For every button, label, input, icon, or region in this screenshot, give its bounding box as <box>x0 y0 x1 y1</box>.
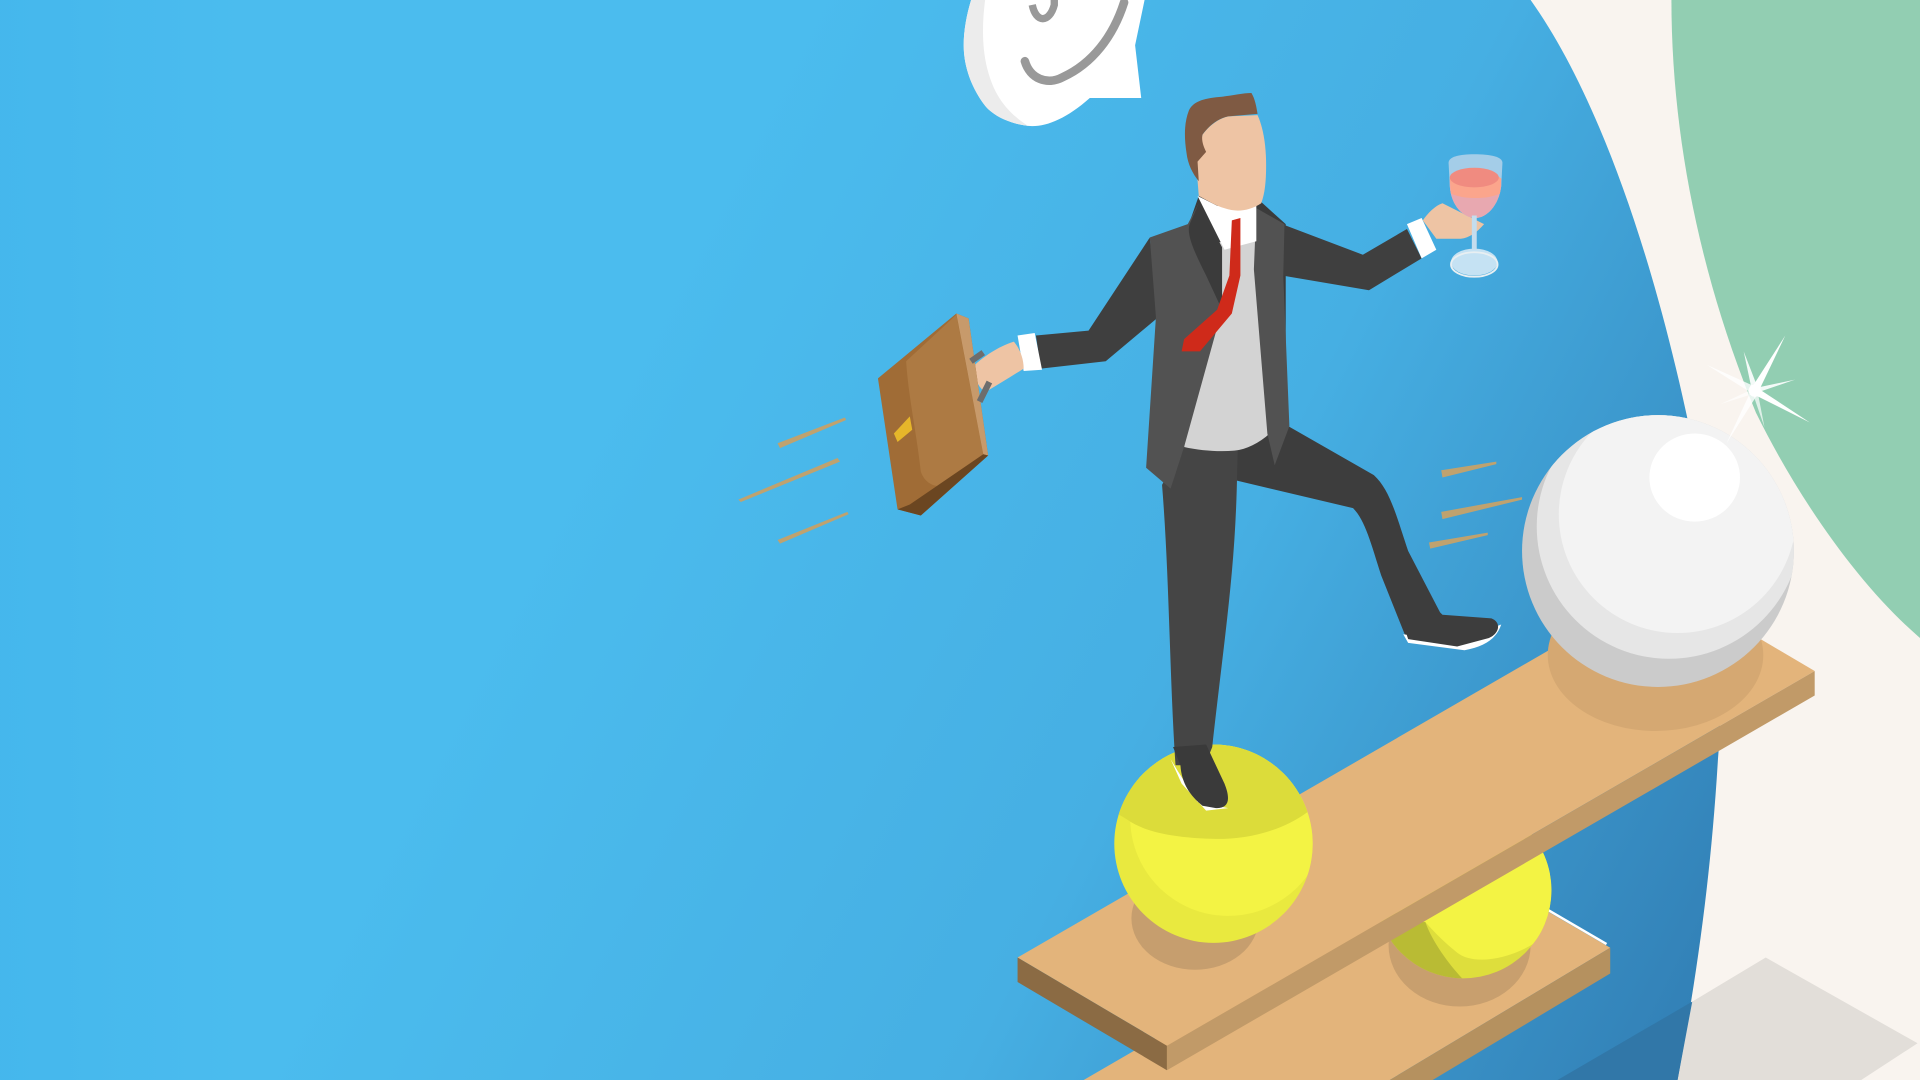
jacket left <box>1146 203 1222 489</box>
jacket right <box>1254 208 1289 465</box>
white ball <box>1522 394 1801 687</box>
shirt <box>1184 233 1270 451</box>
seesaw plank <box>1018 579 1815 1070</box>
lower plank <box>1084 861 1610 1080</box>
wine glass <box>1449 154 1502 277</box>
torso underlay <box>1185 196 1286 443</box>
standing shoe <box>1171 744 1228 811</box>
floor shadow: grey <box>1678 958 1918 1080</box>
right cuff <box>1407 218 1436 258</box>
left hand <box>972 342 1024 392</box>
right hand <box>1423 203 1484 239</box>
left cuff <box>1018 333 1042 371</box>
speech bubble with smile <box>964 0 1144 126</box>
collar <box>1198 196 1256 250</box>
face and hair <box>1185 93 1266 211</box>
sparkle <box>1707 336 1810 443</box>
lapel <box>1189 203 1222 310</box>
businessman <box>972 93 1501 811</box>
lower yellow ball <box>1381 834 1552 978</box>
speed lines: right <box>1429 462 1522 549</box>
raised shoe <box>1403 602 1501 650</box>
background: green curved shape <box>1671 0 1920 638</box>
tie <box>1182 218 1240 351</box>
briefcase <box>878 313 989 516</box>
left arm <box>1036 238 1158 369</box>
upper yellow ball <box>1114 744 1313 943</box>
right arm <box>1282 224 1422 290</box>
raised leg <box>1231 426 1440 637</box>
standing leg <box>1162 441 1238 765</box>
speed lines: left <box>738 418 849 544</box>
